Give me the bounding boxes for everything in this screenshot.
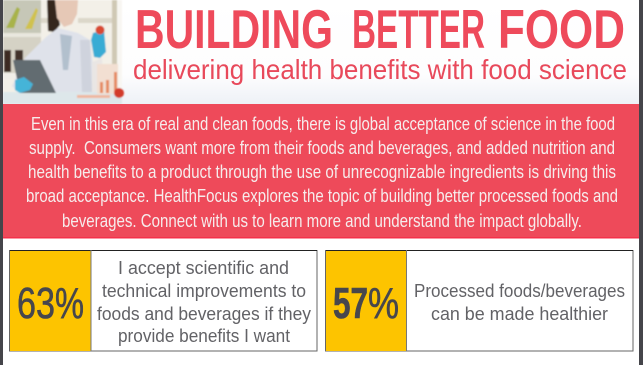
right edge strip xyxy=(639,0,643,365)
stat description: Processed foods/beverages xyxy=(414,281,625,301)
stat value 63%: 63 xyxy=(17,279,55,328)
stat description xyxy=(414,281,625,324)
photo: scientist inspecting tomato xyxy=(3,0,124,104)
stat card: 63% xyxy=(10,250,317,351)
stat value 57% xyxy=(326,251,406,351)
header background xyxy=(3,0,639,104)
stat description: foods and beverages if they xyxy=(97,304,311,324)
stat description: provide benefits I want xyxy=(118,326,290,346)
left edge strip xyxy=(0,0,3,365)
stat description: technical improvements to xyxy=(102,281,306,301)
panel: intro text xyxy=(3,104,639,238)
stat value 63% xyxy=(10,251,91,351)
stat value 57%: % xyxy=(368,279,399,328)
stat description: I accept scientific and xyxy=(118,258,289,278)
stat description: can be made healthier xyxy=(431,304,608,324)
stat value 63%: % xyxy=(55,279,84,328)
stat description xyxy=(97,258,311,346)
title xyxy=(135,0,625,60)
stat card: 57% xyxy=(326,250,633,351)
stat value 57%: 57 xyxy=(333,279,368,328)
